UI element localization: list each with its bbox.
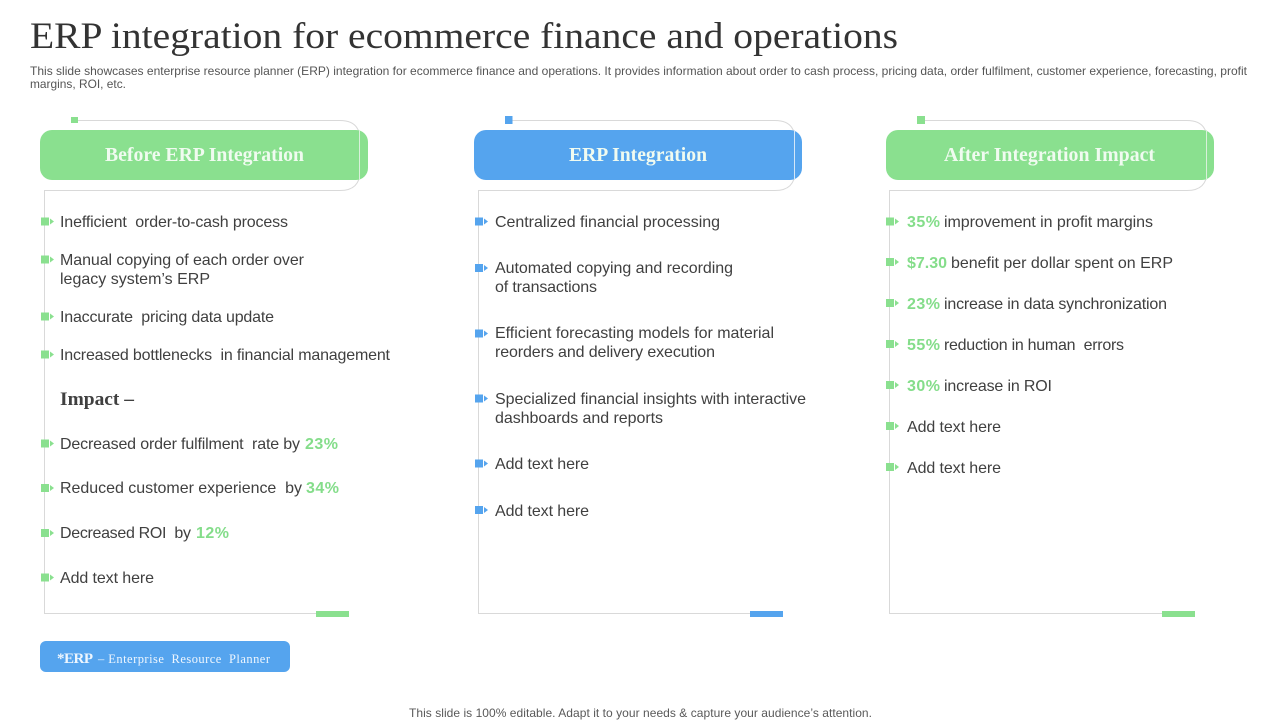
list: problems: Inefficient order-to-cash process [60, 214, 288, 231]
list: impact: 23% [305, 436, 338, 453]
panel: after integration impact [886, 116, 1214, 617]
list: impact: Add text here [60, 570, 154, 587]
list: results: reduction in human errors [944, 337, 1124, 354]
footer note: This slide is 100% editable. Adapt it to your needs & capture your audience’s attention. [409, 706, 872, 720]
list: problems: Increased bottlenecks in financial management [60, 347, 391, 364]
list: integration points: Efficient forecasting models for material [495, 325, 774, 342]
list: impact: Reduced customer experience by [60, 480, 302, 497]
list: results: increase in ROI [944, 378, 1052, 395]
header: after integration impact: After Integration Impact [944, 144, 1155, 166]
list: results: Add text here [907, 460, 1001, 477]
list: integration points [475, 214, 806, 520]
list: results: 35% [907, 214, 940, 231]
subtitle text block: margins, ROI, etc. [30, 77, 126, 91]
list: integration points: Add text here [495, 456, 589, 473]
marker square [71, 117, 78, 123]
list: impact: 12% [196, 525, 229, 542]
title: ERP integration for ecommerce finance and operations [30, 16, 898, 57]
header: before ERP integration: Before ERP Integration [105, 144, 304, 166]
list: integration points: of transactions [495, 279, 597, 296]
list: results: increase in data synchronization [944, 296, 1167, 313]
list: impact: Decreased order fulfilment rate by [60, 436, 300, 453]
list: problems: legacy system’s ERP [60, 271, 210, 288]
header: before ERP integration [40, 130, 368, 180]
panel: before ERP integration [40, 117, 391, 617]
marker bar [316, 611, 349, 617]
list: integration points: dashboards and reports [495, 410, 663, 427]
marker square [505, 116, 512, 124]
panel outline [478, 120, 795, 614]
list: integration points: reorders and delivery execution [495, 344, 715, 361]
list: results: Add text here [907, 419, 1001, 436]
subtitle text block: This slide showcases enterprise resource planner (ERP) integration for ecommerce finance and operations. It provides information about order to cash process, pricing data, order fulfilment, customer experience, forecasting, profit [30, 64, 1248, 78]
list: integration points: Centralized financial processing [495, 214, 720, 231]
list: impact: Decreased ROI by [60, 525, 191, 542]
list: problems [41, 214, 391, 364]
marker square [917, 116, 925, 124]
panel outline [44, 120, 360, 614]
panel: ERP integration [474, 116, 806, 617]
list: results: improvement in profit margins [944, 214, 1153, 231]
marker bar [1162, 611, 1195, 617]
header: ERP integration [474, 130, 802, 180]
list: results: $7.30 [907, 255, 947, 272]
list: integration points: Specialized financial insights with interactive [495, 391, 806, 408]
list: impact [41, 436, 339, 587]
list: results: 23% [907, 296, 940, 313]
list: problems: Inaccurate pricing data update [60, 309, 274, 326]
list: results [886, 214, 1173, 477]
list: results: 55% [907, 337, 940, 354]
callout: ERP definition: *ERP [57, 651, 93, 667]
list: integration points: Automated copying and recording [495, 260, 733, 277]
header: ERP integration: ERP Integration [569, 144, 707, 166]
callout: ERP definition [40, 641, 290, 672]
list: results: benefit per dollar spent on ERP [951, 255, 1173, 272]
list: problems: Manual copying of each order over [60, 252, 305, 269]
list: integration points: Add text here [495, 503, 589, 520]
panel outline [890, 120, 1207, 614]
callout: ERP definition: – Enterprise Resource Planner [97, 652, 271, 666]
list: impact: 34% [306, 480, 339, 497]
subtitle text block [30, 64, 1248, 91]
list: results: 30% [907, 378, 940, 395]
impact heading: Impact – [60, 389, 134, 410]
header: after integration impact [886, 130, 1214, 180]
marker bar [750, 611, 783, 617]
